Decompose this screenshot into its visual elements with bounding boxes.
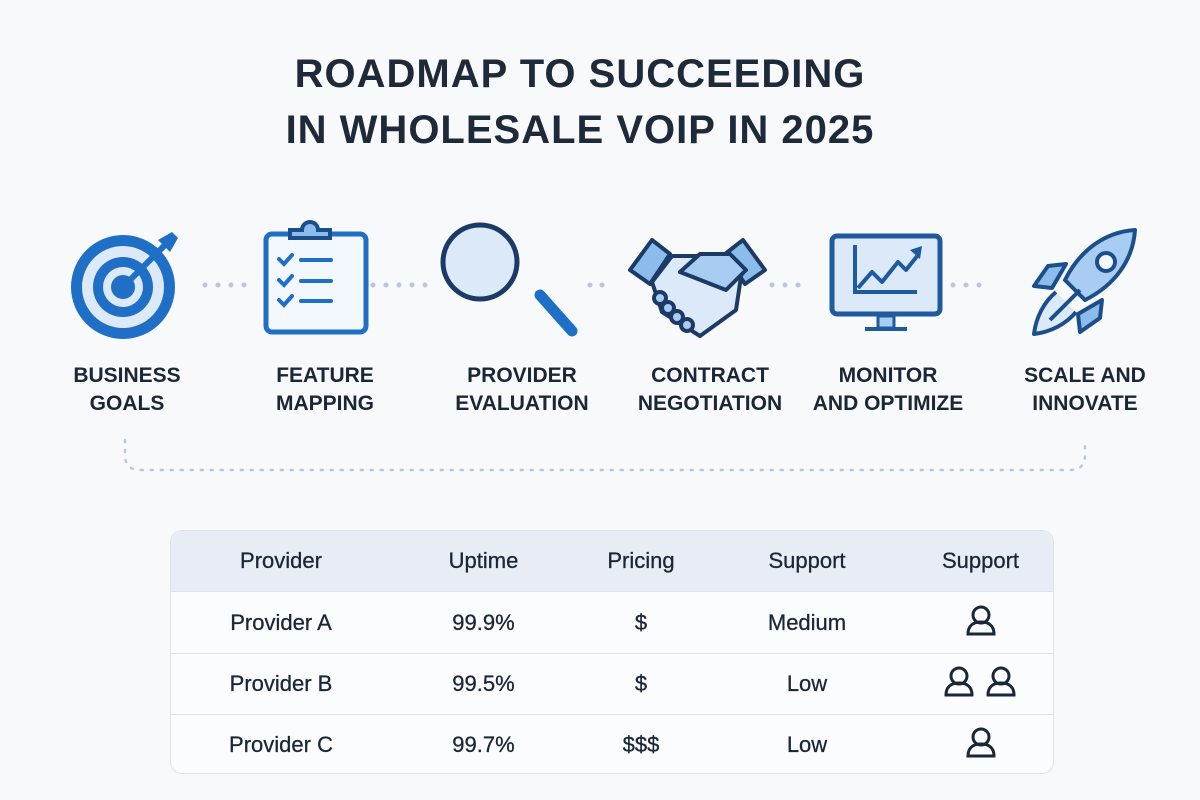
roadmap icons [71, 220, 1137, 472]
label: monitor and optimize: MONITOR [839, 364, 937, 387]
label: contract negotiation [638, 364, 782, 415]
title: IN WHOLESALE VOIP IN 2025 [286, 108, 874, 152]
comparison table: Pricing [607, 548, 675, 573]
comparison table [170, 530, 1054, 774]
comparison table: Low [787, 732, 827, 757]
label: scale and innovate: INNOVATE [1032, 392, 1138, 415]
comparison table: Support [768, 548, 846, 573]
label: monitor and optimize: AND OPTIMIZE [813, 392, 963, 415]
comparison table: Low [787, 671, 827, 696]
comparison table: Medium [768, 610, 846, 634]
icon: clipboard [266, 222, 366, 332]
title [286, 52, 874, 152]
label: business goals: BUSINESS [73, 364, 181, 387]
comparison table: Support [942, 548, 1019, 573]
comparison table: Provider A [230, 610, 332, 634]
icon: monitor [832, 236, 940, 329]
title: ROADMAP TO SUCCEEDING [295, 52, 865, 96]
label: feature mapping: FEATURE [276, 364, 374, 387]
comparison table: Provider C [229, 732, 333, 757]
comparison table: $$$ [623, 732, 659, 757]
label: contract negotiation: NEGOTIATION [638, 392, 782, 415]
comparison table: Provider [240, 548, 322, 573]
label: provider evaluation: EVALUATION [455, 392, 589, 415]
icon: target [71, 232, 178, 339]
comparison table: $ [635, 671, 647, 696]
comparison table: $ [635, 610, 647, 634]
comparison table: 99.7% [452, 732, 515, 757]
comparison table: Provider B [230, 671, 332, 696]
label: business goals: GOALS [90, 392, 164, 415]
comparison table: Uptime [449, 548, 518, 573]
loop connector [125, 440, 1085, 470]
label: feature mapping [276, 364, 374, 415]
label: contract negotiation: CONTRACT [651, 364, 769, 387]
label: provider evaluation: PROVIDER [467, 364, 577, 387]
label: feature mapping: MAPPING [276, 392, 374, 415]
icon: rocket [1034, 230, 1135, 334]
icon: handshake [630, 240, 765, 336]
comparison table: 99.9% [452, 610, 515, 634]
label: business goals [73, 364, 181, 415]
label: scale and innovate: SCALE AND [1024, 364, 1146, 387]
label: provider evaluation [455, 364, 589, 415]
label: scale and innovate [1024, 364, 1146, 415]
comparison table: 99.5% [452, 671, 515, 696]
icon: magnifier [443, 225, 572, 331]
connector dots [202, 282, 982, 288]
label: monitor and optimize [813, 364, 963, 415]
